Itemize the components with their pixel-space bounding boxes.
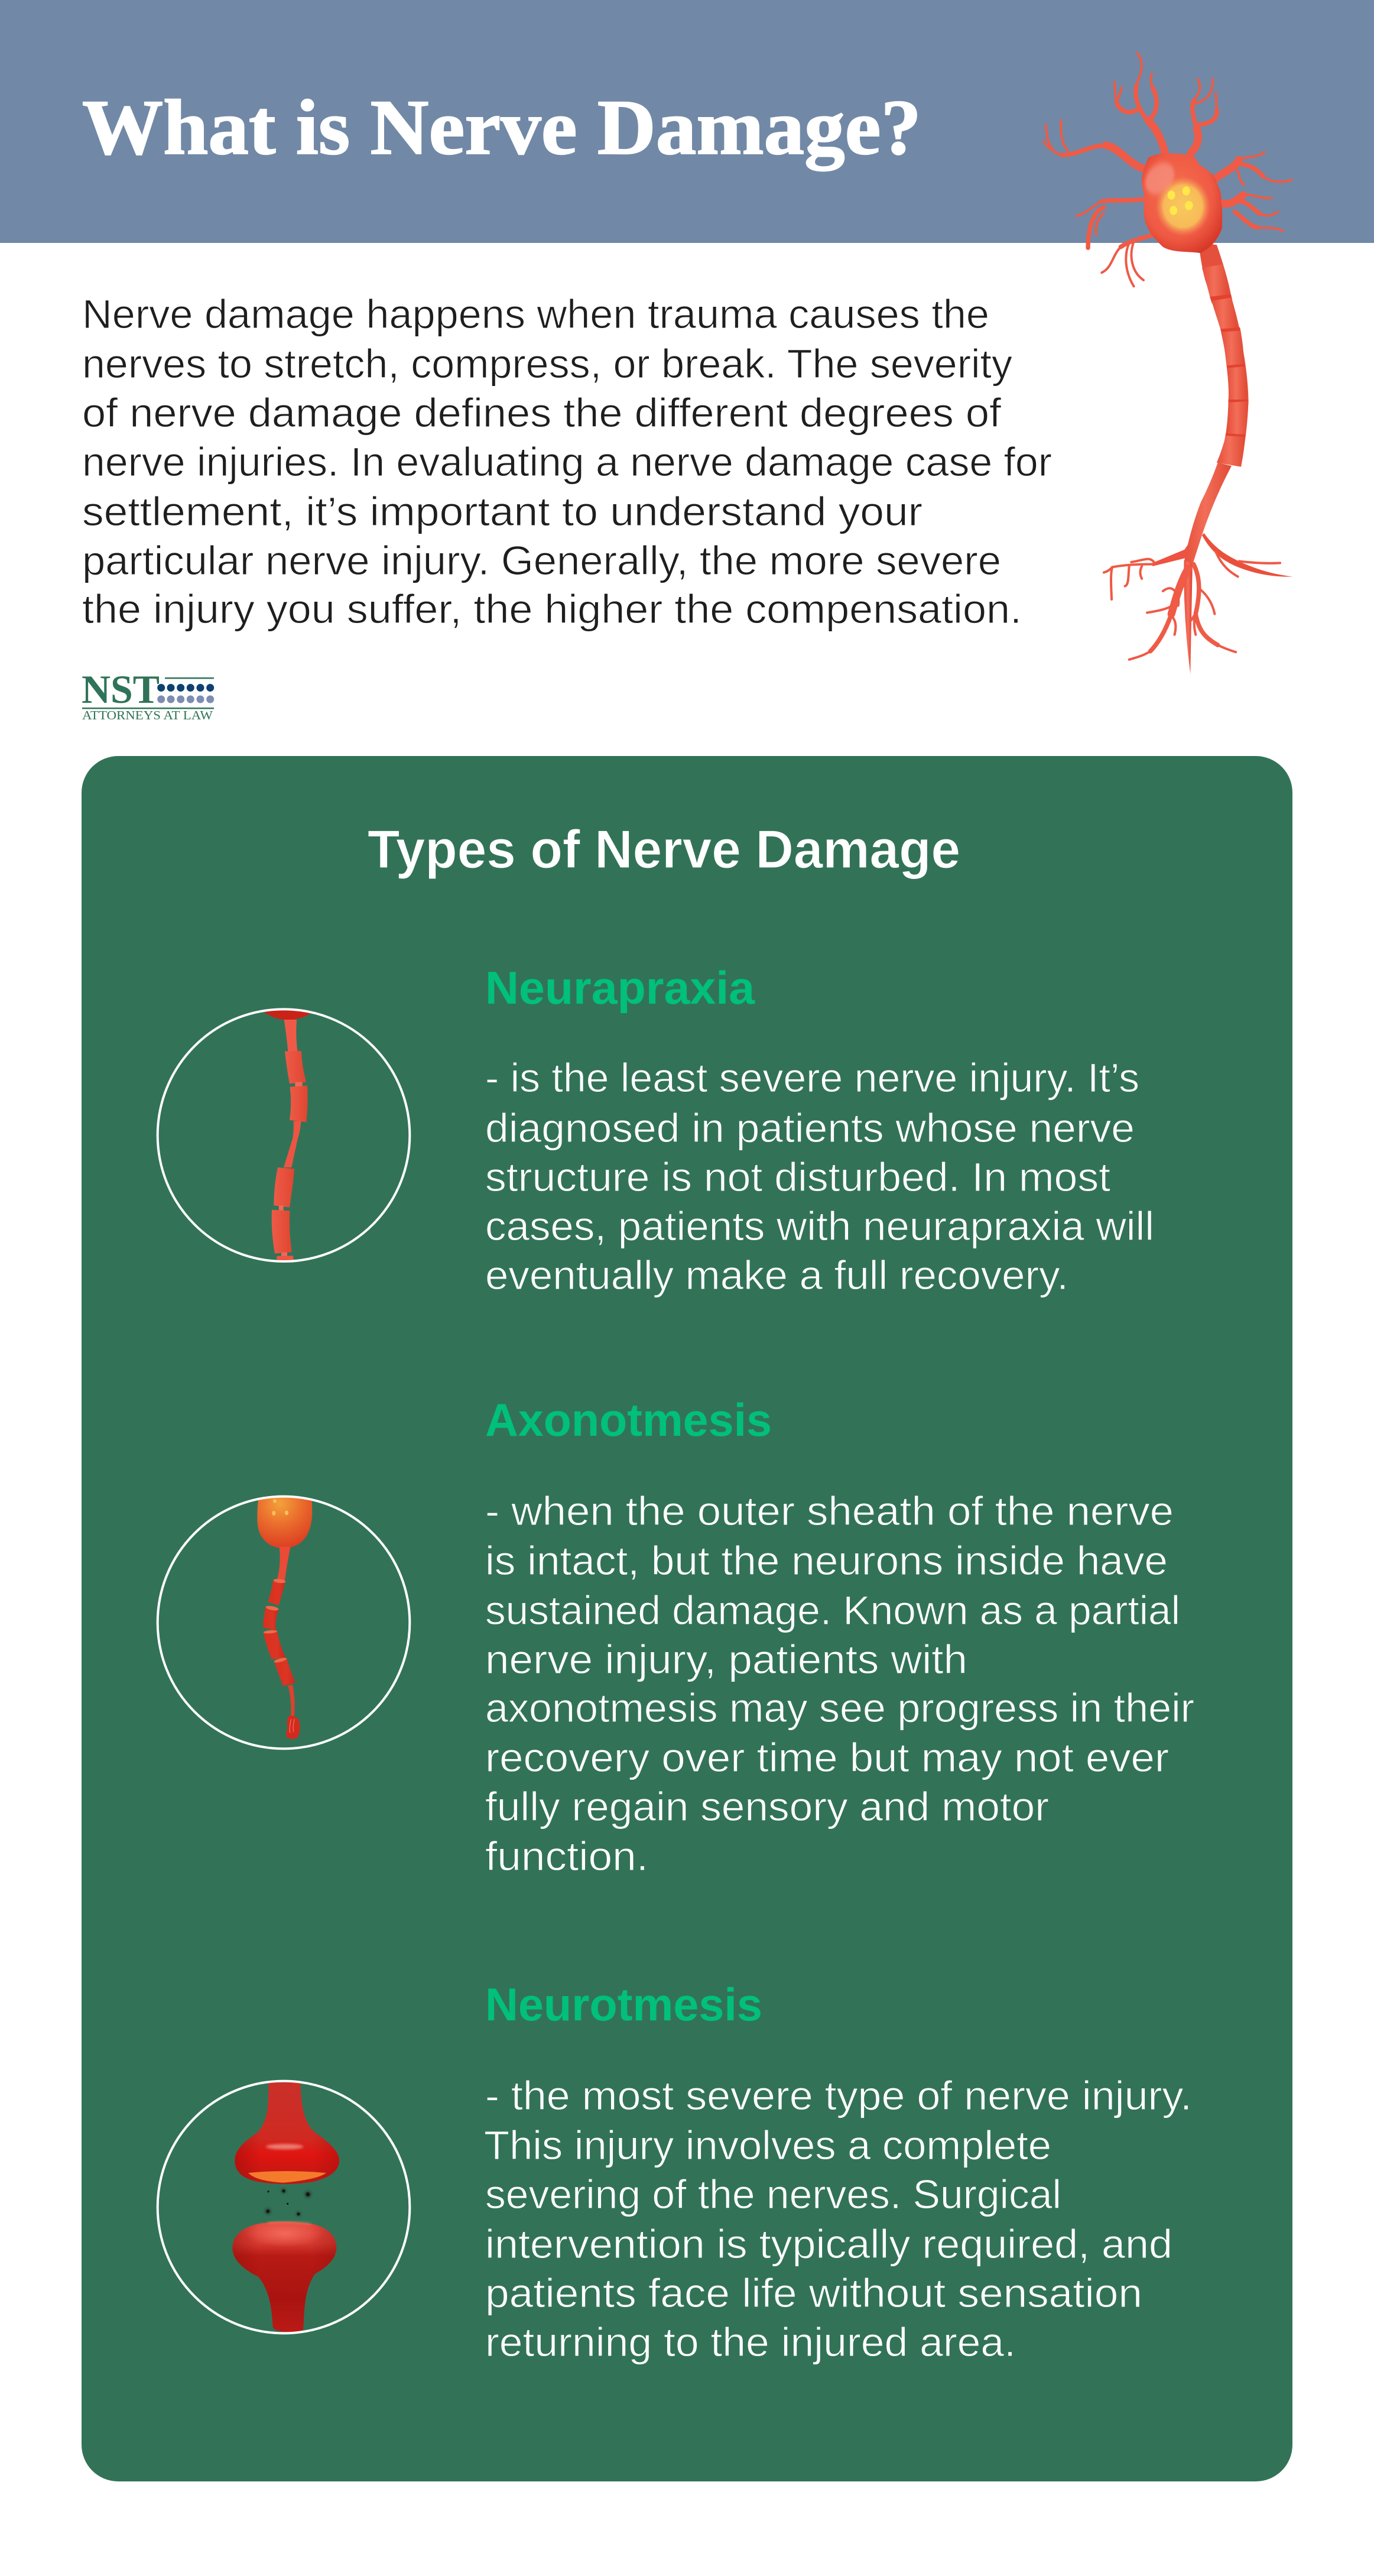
intro paragraph: nerves to stretch, compress, or break. The severity bbox=[82, 341, 1013, 387]
intro paragraph: nerve injuries. In evaluating a nerve damage case for bbox=[82, 439, 1052, 485]
text: Neurotmesis description bbox=[484, 2073, 1192, 2365]
intro paragraph: particular nerve injury. Generally, the more severe bbox=[82, 538, 1001, 583]
icon: Neurapraxia damaged axon in circle bbox=[158, 1007, 410, 1265]
text: Neurotmesis description: returning to the injured area. bbox=[485, 2319, 1016, 2365]
intro paragraph bbox=[82, 291, 1052, 632]
heading: Axonotmesis: Axonotmesis bbox=[485, 1394, 772, 1446]
icon: Neurotmesis severed synapse in circle bbox=[158, 2081, 410, 2333]
text: Neurapraxia description: diagnosed in patients whose nerve bbox=[485, 1105, 1135, 1151]
intro paragraph: of nerve damage defines the different degrees of bbox=[82, 390, 1002, 436]
text: Neurotmesis description: severing of the nerves. Surgical bbox=[485, 2172, 1061, 2217]
logo wordmark: NST bbox=[82, 667, 160, 712]
heading: Neurotmesis: Neurotmesis bbox=[485, 1978, 762, 2030]
panel: types of nerve damage bbox=[82, 756, 1292, 2481]
neuron illustration bbox=[1044, 53, 1292, 674]
heading: Neurapraxia: Neurapraxia bbox=[485, 962, 755, 1014]
text: Axonotmesis description: sustained damage. Known as a partial bbox=[485, 1588, 1180, 1633]
text: Neurapraxia description: eventually make a full recovery. bbox=[485, 1253, 1068, 1298]
text: Neurapraxia description: - is the least severe nerve injury. It’s bbox=[485, 1055, 1139, 1101]
text: Axonotmesis description: nerve injury, patients with bbox=[485, 1637, 967, 1682]
intro paragraph: the injury you suffer, the higher the compensation. bbox=[82, 586, 1022, 632]
title: What is Nerve Damage? bbox=[82, 83, 921, 171]
text: Neurapraxia description bbox=[485, 1055, 1154, 1298]
text: Neurapraxia description: cases, patients with neurapraxia will bbox=[485, 1203, 1154, 1249]
text: Axonotmesis description bbox=[485, 1488, 1194, 1879]
text: Axonotmesis description: function. bbox=[485, 1834, 648, 1879]
text: Neurotmesis description: This injury involves a complete bbox=[484, 2123, 1051, 2168]
text: Neurotmesis description: intervention is typically required, and bbox=[485, 2221, 1172, 2267]
text: Neurotmesis description: - the most severe type of nerve injury. bbox=[485, 2073, 1192, 2118]
intro paragraph: Nerve damage happens when trauma causes the bbox=[82, 291, 989, 337]
text: Axonotmesis description: recovery over time but may not ever bbox=[485, 1735, 1169, 1780]
text: Axonotmesis description: fully regain sensory and motor bbox=[485, 1784, 1049, 1829]
text: Axonotmesis description: - when the outer sheath of the nerve bbox=[485, 1488, 1174, 1534]
logo: NST Attorneys at Law: ATTORNEYS AT LAW bbox=[82, 708, 213, 722]
header band bbox=[0, 0, 1374, 243]
text: Neurotmesis description: patients face life without sensation bbox=[485, 2270, 1142, 2316]
panel heading: Types of Nerve Damage bbox=[368, 820, 960, 880]
icon: Axonotmesis damaged neuron in circle bbox=[158, 1495, 410, 1748]
logo: NST Attorneys at Law bbox=[82, 667, 214, 722]
intro paragraph: settlement, it’s important to understand your bbox=[82, 489, 923, 534]
text: Axonotmesis description: axonotmesis may see progress in their bbox=[485, 1685, 1194, 1731]
text: Neurapraxia description: structure is not disturbed. In most bbox=[485, 1154, 1110, 1200]
text: Axonotmesis description: is intact, but the neurons inside have bbox=[485, 1538, 1168, 1584]
